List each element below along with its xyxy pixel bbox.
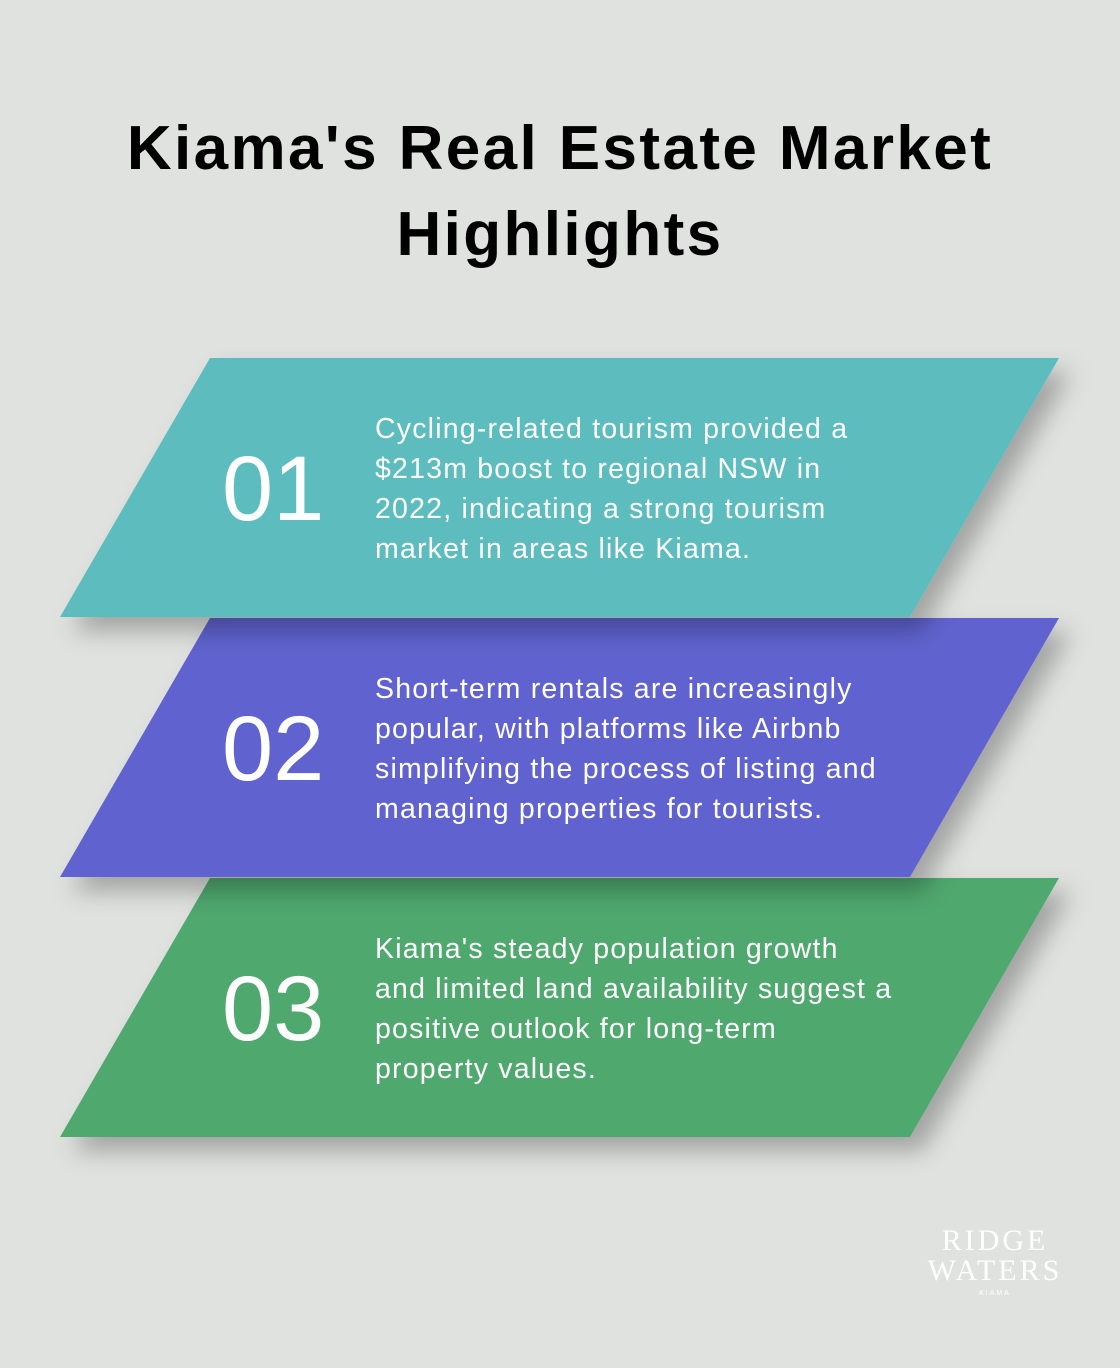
text 01: 2022, indicating a strong tourism (375, 493, 827, 525)
text 02: Short-term rentals are increasingly (375, 673, 853, 705)
text 02: popular, with platforms like Airbnb (375, 713, 842, 745)
text 01: $213m boost to regional NSW in (375, 453, 821, 485)
number 02: 02 (222, 698, 324, 800)
text 01 (375, 413, 848, 565)
logo: KIAMA (979, 1290, 1011, 1297)
title (127, 114, 993, 269)
logo: RIDGE (942, 1224, 1048, 1257)
logo: WATERS (928, 1254, 1062, 1287)
band 3 (60, 878, 1059, 1137)
band 1 (60, 358, 1059, 617)
text 03: property values. (375, 1053, 597, 1085)
text 01: Cycling-related tourism provided a (375, 413, 848, 445)
text 03 (375, 933, 892, 1085)
text 02 (375, 673, 877, 825)
text 03: positive outlook for long-term (375, 1013, 777, 1045)
band 2 (60, 618, 1059, 877)
text 03: Kiama's steady population growth (375, 933, 839, 965)
text 02: simplifying the process of listing and (375, 753, 877, 785)
title: Highlights (396, 200, 724, 269)
text 02: managing properties for tourists. (375, 793, 823, 825)
title: Kiama's Real Estate Market (127, 114, 993, 183)
number 03: 03 (222, 958, 324, 1060)
text 03: and limited land availability suggest a (375, 973, 892, 1005)
text 01: market in areas like Kiama. (375, 533, 751, 565)
logo (928, 1224, 1062, 1297)
number 01: 01 (222, 438, 324, 540)
